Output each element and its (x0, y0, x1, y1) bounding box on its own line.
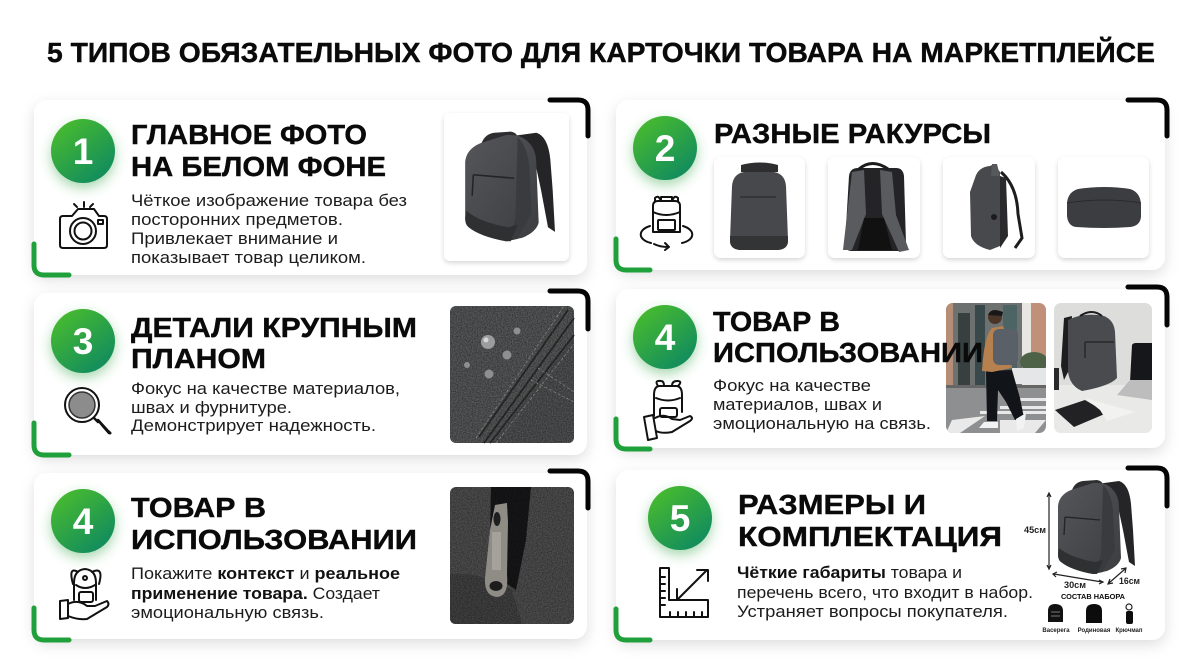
label: width: 30см (1064, 580, 1086, 591)
description: Привлекает внимание и (131, 230, 338, 248)
number badge 4 (633, 305, 697, 369)
photo: fabric texture with water drops (450, 306, 574, 443)
heading (713, 306, 983, 368)
description: Чёткое изображение товара без (131, 192, 407, 210)
description: Устраняет вопросы покупателя. (737, 603, 1008, 621)
description: показывает товар целиком. (131, 249, 366, 267)
panel: 4 product in use (right) (616, 287, 1167, 449)
heading: ТОВАР В (131, 492, 266, 523)
heading: ТОВАР В (713, 306, 840, 337)
label: depth: 16см (1119, 576, 1140, 587)
description: швах и фурнитуре. (131, 399, 292, 417)
number badge 4: 4 (73, 501, 94, 542)
description: материалов, швах и (713, 396, 882, 414)
number badge 4 (51, 489, 115, 553)
icon: ruler and arrow (660, 568, 708, 617)
icon: backpack on hand (644, 381, 692, 440)
heading: ИСПОЛЬЗОВАНИИ (713, 337, 983, 368)
description: эмоциональную связь. (131, 604, 324, 622)
icon: hand holding backpack (60, 569, 108, 619)
description (737, 564, 1033, 621)
diagram: backpack dimensions (1024, 480, 1140, 591)
panel: 2 different angles (616, 100, 1167, 270)
number badge 5: 5 (670, 498, 690, 539)
description (131, 565, 400, 622)
kit heading: СОСТАВ НАБОРА (1061, 592, 1126, 601)
number badge 3: 3 (73, 321, 93, 362)
description: Фокус на качестве (713, 377, 871, 395)
panel: 1 main photo (34, 100, 588, 275)
kit contents (1042, 592, 1143, 634)
heading (738, 489, 1002, 552)
icon: magnifier (65, 388, 110, 433)
panel: 5 sizes and contents (616, 468, 1167, 640)
description (131, 192, 407, 267)
photo: flat lay with backpack (1054, 303, 1152, 433)
heading (131, 119, 386, 182)
description: эмоциональную на связь. (713, 415, 931, 433)
heading: ПЛАНОМ (131, 343, 266, 374)
number badge 2: 2 (655, 128, 675, 169)
label: height: 45см (1024, 525, 1046, 536)
photo: man walking on street (946, 303, 1048, 433)
kit item: backpack: Васерега (1042, 628, 1070, 634)
description (713, 377, 931, 433)
heading: ДЕТАЛИ КРУПНЫМ (131, 312, 417, 343)
number badge 1: 1 (73, 131, 93, 172)
description: Покажите контекст и реальное (131, 565, 400, 583)
heading (131, 312, 417, 374)
heading: РАЗНЫЕ РАКУРСЫ (714, 118, 991, 149)
description: Фокус на качестве материалов, (131, 380, 400, 398)
number badge 1 (51, 119, 115, 183)
panel: 4 product in use (left) (34, 471, 588, 640)
photo: back view (828, 157, 920, 258)
number badge 3 (51, 309, 115, 373)
photo: backpack on white (444, 113, 569, 261)
description: применение товара. Создает (131, 585, 380, 603)
heading: НА БЕЛОМ ФОНЕ (131, 151, 386, 182)
number badge 5 (648, 486, 712, 550)
description: Чёткие габариты товара и (737, 564, 962, 582)
description (131, 380, 400, 435)
description: посторонних предметов. (131, 211, 343, 229)
photo: bottom view (1058, 157, 1149, 258)
heading: ГЛАВНОЕ ФОТО (131, 119, 367, 150)
heading (131, 492, 417, 555)
heading: КОМПЛЕКТАЦИЯ (738, 521, 1002, 552)
photo: zipper close-up (450, 487, 574, 624)
kit item: keychain: Крючмап (1115, 628, 1143, 634)
number badge 2 (633, 116, 697, 180)
icon: camera (60, 202, 107, 248)
title: 5 ТИПОВ ОБЯЗАТЕЛЬНЫХ ФОТО ДЛЯ КАРТОЧКИ ТОВАРА НА МАРКЕТПЛЕЙСЕ (47, 37, 1155, 68)
heading: ИСПОЛЬЗОВАНИИ (131, 524, 417, 555)
icon: rotating backpack (641, 197, 692, 250)
panel: 3 close-up details (34, 291, 588, 455)
photo: side view (943, 157, 1035, 258)
photo: front view (714, 157, 805, 258)
kit item: pouch: Родиновая (1078, 628, 1111, 634)
description: Демонстрирует надежность. (131, 417, 376, 435)
description: перечень всего, что входит в набор. (737, 584, 1033, 602)
heading: РАЗМЕРЫ И (738, 489, 926, 520)
number badge 4: 4 (655, 317, 676, 358)
